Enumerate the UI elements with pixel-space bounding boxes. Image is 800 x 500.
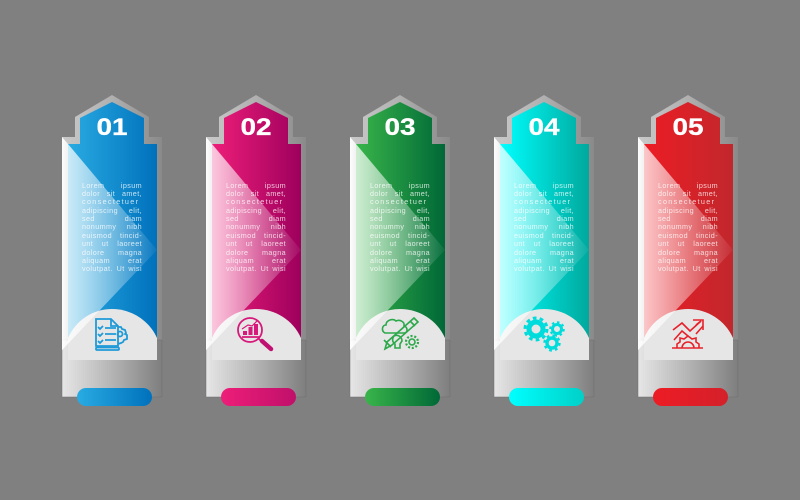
text block: aliquam erat: [226, 256, 286, 265]
text block: aliquam erat: [370, 256, 430, 265]
pill: [509, 388, 584, 406]
text block: consectetuer: [514, 197, 571, 206]
text block: volutpat. Ut wisi: [82, 264, 142, 273]
pill: [653, 388, 728, 406]
text block: adipiscing elit,: [82, 206, 142, 215]
icon: three gears: [525, 318, 564, 351]
text block: consectetuer: [658, 197, 715, 206]
text block: dolore magna: [658, 248, 718, 257]
number 04: 04: [528, 114, 560, 141]
text block: dolor sit amet,: [226, 189, 286, 198]
text block: dolore magna: [82, 248, 142, 257]
text block: euismod tincid-: [658, 231, 718, 240]
panel: step 02: [206, 95, 306, 406]
text block: dolor sit amet,: [370, 189, 430, 198]
panel: step 03: [350, 95, 450, 406]
text block: adipiscing elit,: [370, 206, 430, 215]
text block: adipiscing elit,: [226, 206, 286, 215]
text block: volutpat. Ut wisi: [514, 264, 574, 273]
text block: Lorem ipsum: [82, 180, 142, 190]
number 01: 01: [96, 114, 128, 141]
pill: [221, 388, 296, 406]
panel: step 01: [62, 95, 162, 406]
text block: [514, 180, 574, 273]
icon: magnifier with bar chart: [238, 318, 271, 349]
text block: volutpat. Ut wisi: [370, 264, 430, 273]
number 02: 02: [240, 114, 272, 141]
text block: nonummy nibh: [370, 222, 430, 231]
text block: nonummy nibh: [82, 222, 142, 231]
panel: step 04: [494, 95, 594, 406]
text block: Lorem ipsum: [370, 180, 430, 190]
text block: unt ut laoreet: [82, 239, 142, 248]
text block: euismod tincid-: [514, 231, 574, 240]
text block: sed diam: [82, 214, 142, 223]
text block: [226, 180, 286, 273]
text block: sed diam: [658, 214, 718, 223]
text block: unt ut laoreet: [226, 239, 286, 248]
icon: cloud, pencil, bulb and gear: [382, 318, 418, 349]
text block: [82, 180, 142, 273]
pill: [365, 388, 440, 406]
text block: aliquam erat: [658, 256, 718, 265]
text block: sed diam: [370, 214, 430, 223]
text block: [370, 180, 430, 273]
text block: Lorem ipsum: [226, 180, 286, 190]
text block: consectetuer: [82, 197, 139, 206]
icon: growth arrow with gear: [672, 320, 703, 348]
text block: nonummy nibh: [514, 222, 574, 231]
text block: dolor sit amet,: [658, 189, 718, 198]
text block: aliquam erat: [82, 256, 142, 265]
text block: volutpat. Ut wisi: [226, 264, 286, 273]
text block: Lorem ipsum: [514, 180, 574, 190]
text block: dolor sit amet,: [514, 189, 574, 198]
number 05: 05: [672, 114, 704, 141]
text block: dolor sit amet,: [82, 189, 142, 198]
text block: dolore magna: [226, 248, 286, 257]
text block: euismod tincid-: [226, 231, 286, 240]
text block: euismod tincid-: [82, 231, 142, 240]
panel: step 05: [638, 95, 738, 406]
icon: checklist document with gear: [96, 319, 127, 350]
text block: volutpat. Ut wisi: [658, 264, 718, 273]
pill: [77, 388, 152, 406]
number 03: 03: [384, 114, 416, 141]
text block: nonummy nibh: [658, 222, 718, 231]
text block: unt ut laoreet: [658, 239, 718, 248]
text block: sed diam: [226, 214, 286, 223]
text block: euismod tincid-: [370, 231, 430, 240]
text block: sed diam: [514, 214, 574, 223]
text block: unt ut laoreet: [370, 239, 430, 248]
text block: consectetuer: [370, 197, 427, 206]
text block: adipiscing elit,: [658, 206, 718, 215]
text block: dolore magna: [370, 248, 430, 257]
text block: dolore magna: [514, 248, 574, 257]
text block: unt ut laoreet: [514, 239, 574, 248]
text block: nonummy nibh: [226, 222, 286, 231]
text block: aliquam erat: [514, 256, 574, 265]
text block: adipiscing elit,: [514, 206, 574, 215]
text block: consectetuer: [226, 197, 283, 206]
text block: [658, 180, 718, 273]
text block: Lorem ipsum: [658, 180, 718, 190]
